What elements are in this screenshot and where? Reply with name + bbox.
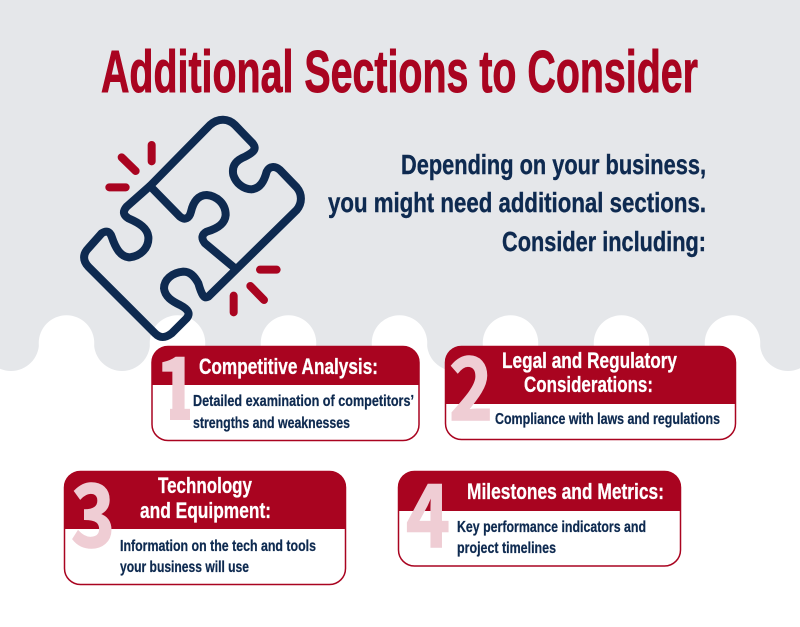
number 1: 1: [155, 320, 199, 446]
scalloped grey background: [0, 0, 800, 371]
intro text: Depending on your business,: [401, 149, 706, 180]
card 1 header: [152, 346, 419, 385]
card 4: milestones and metrics: [398, 447, 681, 573]
card 1 heading: Competitive Analysis:: [199, 354, 378, 379]
card 4 body: [457, 519, 646, 557]
card 2 heading: Legal and Regulatory: [502, 348, 678, 373]
card 4 heading: Milestones and Metrics:: [467, 479, 664, 504]
card 3 heading: [140, 473, 271, 523]
card 1 body: Detailed examination of competitors’: [193, 393, 414, 410]
card 1 body: strengths and weaknesses: [193, 415, 350, 432]
card 3 body: your business will use: [120, 559, 249, 576]
card 2 heading: Considerations:: [524, 372, 653, 397]
card 2 header: [445, 346, 736, 404]
card 3 heading: Technology: [158, 473, 253, 498]
intro text: you might need additional sections.: [328, 187, 706, 218]
intro text: [328, 149, 706, 257]
number 2: 2: [449, 320, 493, 446]
card 3: technology and equipment: [64, 447, 346, 584]
card 4 header: [398, 471, 681, 511]
number 4: 4: [406, 447, 450, 573]
icon: puzzle pieces: [84, 120, 301, 337]
intro text: Consider including:: [502, 226, 706, 257]
card 1 body: [193, 393, 414, 432]
card 2: legal and regulatory: [445, 320, 736, 446]
card 4 body: Key performance indicators and: [457, 519, 646, 536]
card 2 heading: [502, 348, 678, 397]
card 3 body: [120, 538, 316, 576]
card 2 body: Compliance with laws and regulations: [495, 411, 720, 428]
card 4 body: project timelines: [457, 540, 556, 557]
puzzle centre seam: [150, 186, 235, 268]
puzzle outline: [84, 120, 301, 337]
card 3 heading: and Equipment:: [140, 498, 271, 523]
card 3 body: Information on the tech and tools: [120, 538, 316, 555]
sparks: [109, 145, 277, 312]
number 3: 3: [71, 447, 115, 573]
card 3 header: [64, 471, 346, 529]
card 1: competitive analysis: [151, 346, 420, 442]
